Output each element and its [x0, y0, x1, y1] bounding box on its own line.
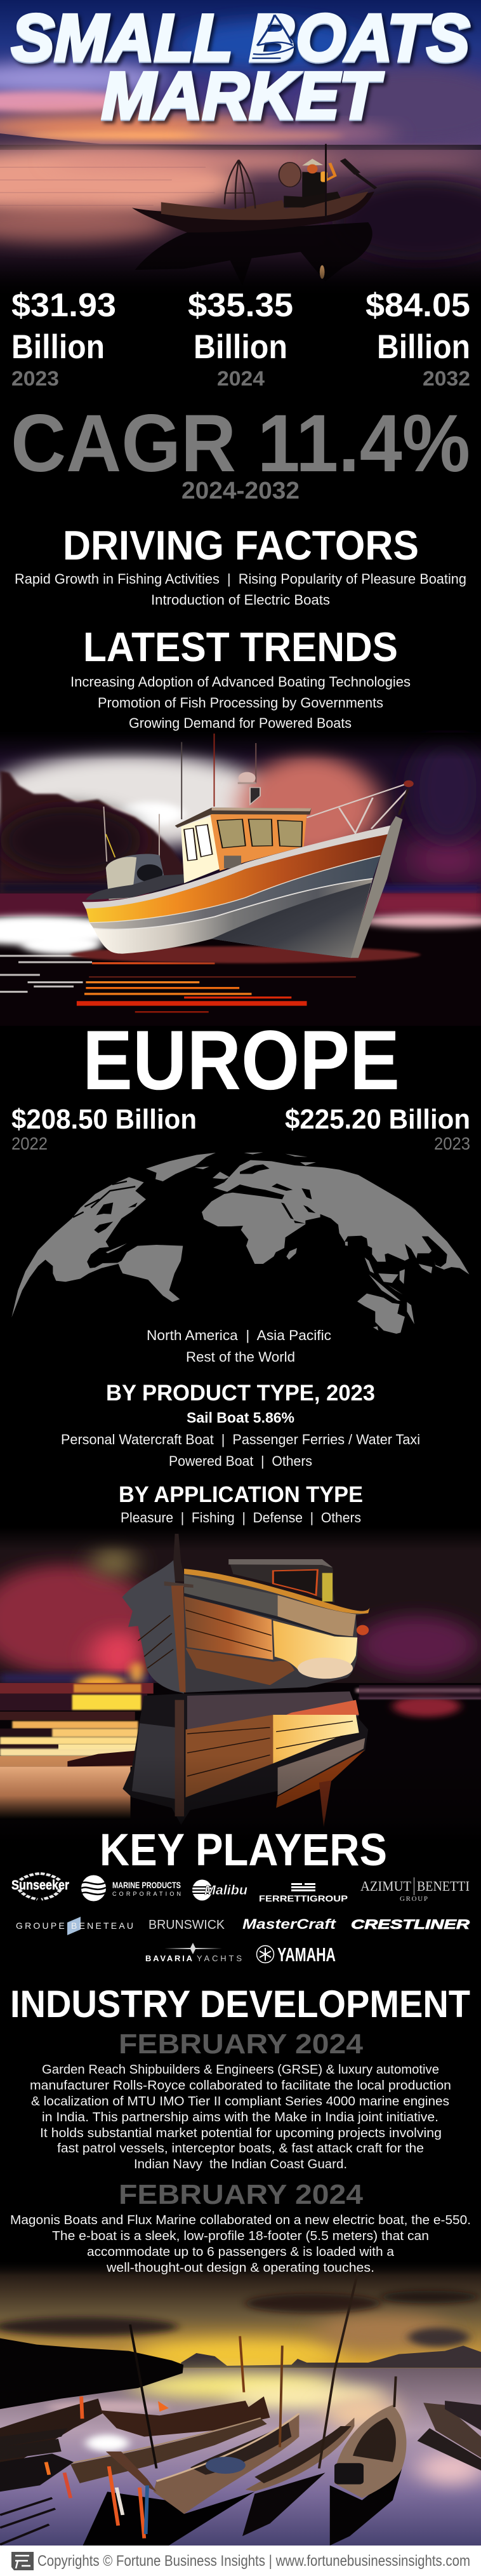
development entry: Magonis and Flux Marine: accommodate up to 6 passengers & is loaded with a: [87, 2245, 395, 2259]
logo: Crestliner: CRESTLINER: [351, 1917, 470, 1932]
panel: latest trends: Increasing Adoption of Advanced Boating Technologies: [70, 674, 411, 690]
logo: Brunswick: BRUNSWICK: [148, 1918, 225, 1932]
stat: 2024 market size: Billion: [194, 328, 287, 366]
panel: by application type: [119, 1482, 363, 1526]
cabin top: [230, 1565, 334, 1603]
logo: Groupe Beneteau: [16, 1917, 133, 1935]
left jetty and boats: [0, 2398, 103, 2462]
logo: Ferretti Group: [259, 1883, 348, 1903]
development entry: GRSE and Rolls-Royce: Indian Navy the Indian Coast Guard.: [134, 2157, 347, 2171]
panel: by product type: Personal Watercraft Boat | Passenger Ferries / Water Taxi: [61, 1432, 420, 1447]
panel: driving factors: [15, 522, 466, 608]
water: [0, 2368, 481, 2546]
stat: 2023 market size: 2023: [11, 367, 59, 390]
development entry: GRSE and Rolls-Royce: [30, 2029, 451, 2171]
stat: 2032 market size: $84.05: [366, 287, 470, 324]
stat: 2032 market size: 2032: [423, 367, 470, 390]
stat: 2023 market size: [11, 287, 116, 390]
reflection: [135, 222, 372, 273]
panel: by product type: BY PRODUCT TYPE, 2023: [106, 1381, 375, 1405]
logo: Marine Products: [81, 1875, 181, 1902]
masts: [103, 734, 256, 862]
front boat: [154, 2413, 299, 2514]
hull: [82, 825, 391, 909]
stat: 2024 market size: $35.35: [188, 287, 293, 324]
photo: fishing trawler on water: [0, 732, 481, 1029]
stat: 2024 market size: 2024: [217, 367, 265, 390]
logo: Bavaria Yachts: [145, 1943, 242, 1963]
photo: fisherman at sunset: [0, 0, 481, 298]
panel: latest trends: LATEST TRENDS: [83, 624, 398, 670]
far right boat: [423, 2403, 481, 2458]
stat: 2032 market size: Billion: [377, 328, 470, 366]
distant hills: [181, 2345, 481, 2368]
logo: Groupe Beneteau: GROUPE BENETEAU: [16, 1921, 133, 1931]
bow rail: [307, 783, 408, 833]
reflection: [122, 1691, 368, 1825]
panel: by application type: BY APPLICATION TYPE: [119, 1482, 363, 1507]
title: SMALL BOATS: [11, 1, 470, 75]
logo: Azimut Benetti: [360, 1877, 470, 1903]
development entry: GRSE and Rolls-Royce: FEBRUARY 2024: [119, 2029, 364, 2060]
heading: key players: KEY PLAYERS: [100, 1825, 387, 1875]
panel: latest trends: Growing Demand for Powered Boats: [129, 715, 352, 731]
panel: other regions: Rest of the World: [186, 1349, 295, 1365]
logo: Sunseeker: [11, 1874, 69, 1900]
development entry: Magonis and Flux Marine: The e-boat is a sleek, low-profile 18-footer (5.5 meters) that can: [52, 2229, 429, 2243]
logo: Bavaria Yachts: BAVARIA: [145, 1954, 193, 1963]
panel: by product type: Powered Boat | Others: [169, 1453, 312, 1469]
icon: Fortune Business Insights logo: [11, 2552, 34, 2570]
development entry: GRSE and Rolls-Royce: fast patrol vessels, interceptor boats, & fast attack craft for the: [57, 2142, 424, 2156]
development entry: GRSE and Rolls-Royce: manufacturer Rolls-Royce collaborated to facilitate the local production: [30, 2079, 451, 2093]
title: [11, 1, 470, 134]
development entry: Magonis and Flux Marine: [10, 2179, 471, 2275]
middle boat: [246, 2418, 354, 2492]
logo: Bavaria Yachts: YACHTS: [197, 1954, 242, 1963]
icon: sailboat in letter B: [252, 15, 294, 58]
fisherman: [302, 171, 325, 197]
development entry: GRSE and Rolls-Royce: Garden Reach Shipbuilders & Engineers (GRSE) & luxury automotive: [42, 2063, 439, 2077]
stat: Europe 2023: $225.20 Billion: [285, 1104, 470, 1135]
stat: Europe 2022: [11, 1104, 197, 1153]
cabin: [181, 816, 220, 883]
stat: 2023 market size: $31.93: [11, 287, 116, 324]
panel: by application type: Pleasure | Fishing | Defense | Others: [121, 1510, 361, 1526]
panel: by product type: Sail Boat 5.86%: [187, 1409, 294, 1426]
water: [81, 1683, 155, 1684]
panel: latest trends: [70, 624, 411, 731]
fishing net cone: [225, 160, 255, 208]
poles and ribbons: [130, 2274, 396, 2469]
dark hillside: [0, 770, 184, 894]
logo: Marine Products: MARINE PRODUCTS: [112, 1880, 181, 1890]
panel: other regions: North America | Asia Pacific: [147, 1327, 331, 1343]
panel: other regions: [147, 1327, 331, 1365]
photo: wooden boat with reflection: [0, 1527, 481, 1842]
logo: Azimut Benetti: BENETTI: [417, 1878, 470, 1894]
logo: Malibu: Malibu: [204, 1883, 247, 1898]
rear canopy: [106, 854, 164, 900]
stat: 2023 market size: Billion: [11, 328, 105, 366]
water: [0, 894, 481, 1029]
logo: Sunseeker: Sunseeker: [11, 1878, 69, 1893]
stat: 2032 market size: [366, 287, 470, 390]
panel: latest trends: Promotion of Fish Processing by Governments: [98, 695, 383, 711]
photo: longtail boats at sunset: [0, 2261, 481, 2546]
dark forest: [0, 2338, 183, 2409]
logo: Marine Products: CORPORATION: [112, 1891, 181, 1897]
panel: by product type: [61, 1381, 420, 1469]
logo: Malibu: [192, 1880, 247, 1900]
logo: MasterCraft: MasterCraft: [242, 1916, 337, 1932]
logo: Ferretti Group: FERRETTIGROUP: [259, 1893, 348, 1903]
development entry: GRSE and Rolls-Royce: It holds substantial market potential for upcoming projects involving: [40, 2126, 442, 2140]
panel: driving factors: Rapid Growth in Fishing Activities | Rising Popularity of Pleasure Boating: [15, 571, 466, 587]
stat: 2024 market size: [188, 287, 293, 390]
mooring fender: [357, 1625, 369, 1635]
stat: Europe 2022: 2022: [11, 1134, 48, 1153]
development entry: Magonis and Flux Marine: Magonis Boats and Flux Marine collaborated on a new electric boat, the e-550.: [10, 2213, 471, 2227]
world map: [11, 1152, 470, 1334]
logo: Yamaha: YAMAHA: [277, 1943, 336, 1966]
logo: Azimut Benetti: AZIMUT: [360, 1878, 412, 1894]
logo: Azimut Benetti: GROUP: [400, 1895, 428, 1903]
development entry: Magonis and Flux Marine: FEBRUARY 2024: [119, 2179, 364, 2210]
development entry: Magonis and Flux Marine: well-thought-out design & operating touches.: [106, 2261, 374, 2275]
logo: Yamaha: [256, 1943, 336, 1966]
panel: driving factors: DRIVING FACTORS: [63, 522, 419, 568]
stat: Europe 2023: [285, 1104, 470, 1153]
CAGR callout: 2024-2032: [181, 478, 300, 504]
boat shadows on water: [83, 2492, 254, 2546]
wooden boat: [132, 192, 374, 232]
heading: Europe: EUROPE: [82, 1014, 400, 1108]
oar: [355, 173, 377, 189]
stat: Europe 2022: $208.50 Billion: [11, 1104, 197, 1135]
stat: Europe 2023: 2023: [434, 1134, 470, 1153]
wooden boat hull: [174, 1534, 184, 1581]
development entry: GRSE and Rolls-Royce: & localization of MTU IMO Tier II compliant Series 4000 marine engines: [31, 2095, 449, 2109]
development entry: GRSE and Rolls-Royce: in India. This partnership aims with the Make in India joint initiative.: [42, 2110, 438, 2124]
right boat: [334, 2405, 406, 2498]
footer bar: [0, 2546, 481, 2576]
radar and mirror: [239, 772, 256, 782]
title: MARKET: [102, 60, 383, 134]
title: MARKET: [102, 59, 383, 133]
panel: driving factors: Introduction of Electric Boats: [151, 592, 330, 608]
title: SMALL BOATS: [11, 3, 470, 76]
